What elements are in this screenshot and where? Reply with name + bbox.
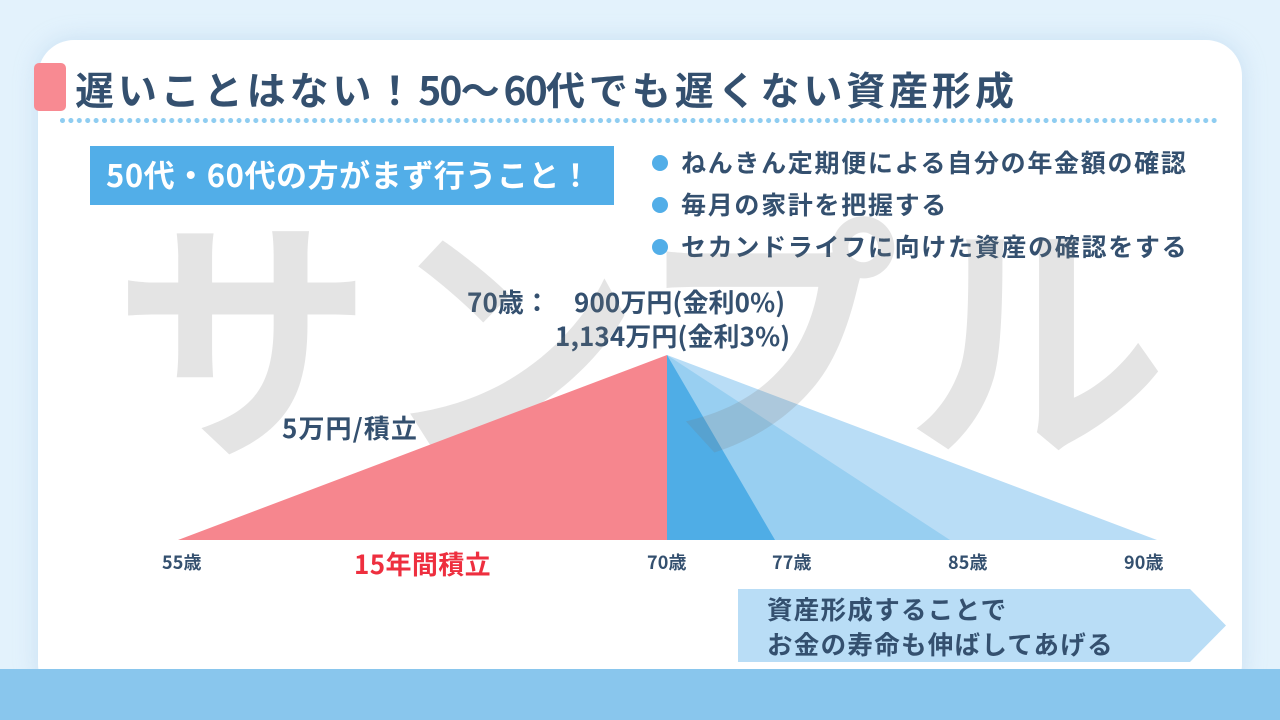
bullet 1: ねんきん定期便による自分の年金額の確認	[681, 144, 1188, 180]
bullet list	[652, 144, 1188, 264]
label: monthly savings: 5万円/積立	[282, 409, 418, 446]
chart: savings triangle	[178, 355, 667, 540]
label: 15 years of saving: 15年間積立	[354, 545, 491, 582]
bullet 3: セカンドライフに向けた資産の確認をする	[681, 228, 1188, 264]
title: 遅いことはない！50～60代でも遅くない資産形成	[75, 61, 1018, 117]
bullet 2: 毎月の家計を把握する	[681, 186, 948, 222]
amount at 0 percent: 70歳：	[467, 283, 550, 320]
arrow text: お金の寿命も伸ばしてあげる	[767, 625, 1114, 662]
arrow shape	[738, 589, 1226, 662]
watermark: サンプル	[113, 136, 1173, 513]
age label 55: 55歳	[162, 549, 202, 575]
arrow text	[767, 590, 1114, 662]
bottom band	[0, 669, 1280, 720]
chart label: 70 years amounts	[467, 283, 790, 354]
age label 90: 90歳	[1124, 549, 1164, 575]
pink title marker	[34, 63, 66, 111]
amount at 3 percent: 1,134万円(金利3%)	[555, 317, 790, 354]
age label 85: 85歳	[948, 549, 988, 575]
arrow callout	[738, 589, 1226, 662]
amount value at 0 percent: 900万円(金利0%)	[574, 283, 785, 320]
subheading box: 50代・60代の方がまず行うこと！	[106, 151, 592, 196]
age label 70: 70歳	[647, 549, 687, 575]
dotted divider	[60, 118, 1218, 123]
age label 77: 77歳	[772, 549, 812, 575]
arrow text: 資産形成することで	[767, 590, 1007, 627]
